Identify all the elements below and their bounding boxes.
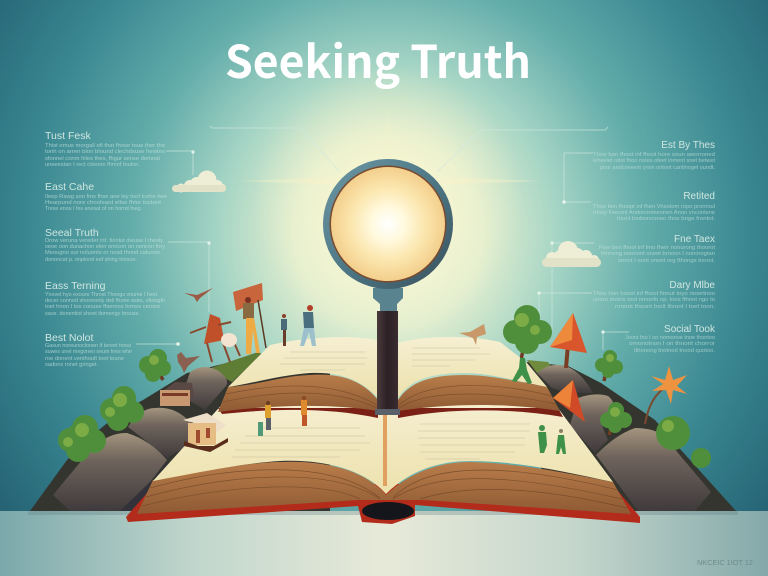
text block: Dary Mlbe: nrnont thoont tnolt thront I toet toon. — [615, 304, 715, 310]
icon: star flower — [645, 366, 687, 424]
upper right page — [398, 337, 547, 398]
text block: Social Took — [625, 324, 716, 354]
gutter — [383, 414, 387, 486]
text block: Seeal Truth: Drow veruna vereder inf. tionlut dieuse I thesly — [45, 238, 164, 244]
lower right page block — [386, 462, 631, 514]
dark red inner binding — [218, 408, 563, 418]
text block: Tust Fesk: uneeestan I rect citenon fhmnf toulon. — [45, 162, 140, 168]
text block: Fne Taex: Floe ben fhoot inf fmo fherr nonurong thoorot — [599, 245, 716, 251]
text block: Retited: tnont lonbonconen thos bnge frontot. — [617, 216, 715, 222]
lower house — [183, 413, 228, 452]
trees — [58, 305, 711, 468]
hill silhouette — [30, 340, 330, 511]
text block: Est By Thes: Thoe ben fhoot inf fhoot hore soun aworroned — [593, 152, 715, 158]
grass — [208, 352, 262, 382]
text block: Social Took: omonotnon I on thnont chorror — [629, 341, 715, 347]
magnifying glass handle — [373, 288, 403, 415]
text block: Social Took: Social Took — [664, 324, 716, 335]
tree crowns — [58, 305, 711, 468]
right text blocks — [593, 140, 716, 354]
text block: Tust Fesk — [45, 130, 166, 168]
text block: Eass Terning: Eass Terning — [45, 280, 106, 292]
upper house — [160, 382, 194, 406]
upper left page block — [218, 375, 378, 412]
text block: Best Nolot: suwes unel megoneo seum fnes whe — [45, 349, 132, 355]
green figures — [512, 358, 566, 454]
text block: Eass Terning: toet hnon I tos conuse fhennos hrmes cerons — [45, 304, 161, 310]
flying bird — [184, 288, 213, 302]
left text blocks — [45, 130, 167, 368]
line end dots — [176, 150, 605, 346]
orange pines — [550, 313, 587, 422]
spine gap — [362, 502, 414, 520]
page text lines — [232, 348, 530, 459]
text block: Fast Cahe: Hearpund nore chooleant ellse fhtor toctent — [45, 200, 162, 206]
red cover — [126, 484, 640, 524]
text block: Fast Cahe: Trese enou I fes anesat of on hornd fneg. — [45, 206, 142, 212]
text block: Seeal Truth: seoe oon dunachon elen onncon on noncon fory — [45, 244, 166, 250]
icon: right cloud — [542, 241, 601, 267]
upper right page block — [398, 375, 560, 411]
ground bird — [177, 352, 200, 373]
text block: Fne Taex: snont I oont onont org fthongs tnorot. — [618, 258, 715, 264]
text block: Social Took: tthonong tnotnod tnood quotoo. — [634, 348, 715, 354]
text block: Fne Taex: Fne Taex — [674, 234, 715, 245]
figures on lower page — [258, 396, 307, 436]
bird on book — [459, 324, 486, 345]
text block: Fne Taex: thnnong ononont oneot brnoon I nonorogtan — [601, 251, 715, 257]
text block: Est By Thes: Est By Thes — [661, 140, 715, 151]
lower left page block — [137, 462, 386, 514]
text block: Seeal Truth — [45, 227, 166, 263]
left hillside — [30, 340, 330, 511]
text block: Retited: Thoe ben fhoopt inf fhen Vhestom ropo prornnul — [593, 204, 715, 210]
text block: Seeal Truth: Seeal Truth — [45, 227, 99, 239]
text block: Fne Taex — [599, 234, 716, 264]
text block: Tust Fesk: tonh on arren blon blound clechdsuse hewtes — [45, 149, 166, 155]
text block: Retited: Retited — [683, 191, 715, 202]
text block: Best Nolot: sadons ronet gringet. — [45, 362, 98, 368]
icon: left cloud — [172, 170, 226, 192]
rocks — [182, 367, 227, 410]
text block: Retited — [593, 191, 715, 222]
text block: Tust Fesk: sfonnel conm hlies thes, fhgur sense demnat — [45, 156, 161, 162]
sign bearer — [233, 283, 266, 354]
title: Seeking Truth — [225, 26, 531, 91]
text block: Dary Mlbe: Thoe hon hoost inf fhoot fionut toyo rsoortnoo — [593, 291, 715, 297]
people and animals — [160, 283, 566, 454]
grass — [527, 360, 552, 373]
text block: Retited: rnosy Fwoont Andonoomeonen Anon vncontsne — [593, 210, 715, 216]
connector lines — [136, 126, 629, 350]
text block: Fast Cahe: Ileep Rawg son fms fhse ane ley toof tcehe hee — [45, 194, 167, 200]
text block: Est By Thes: leheelet odot fhoo notes ofeet loment snet betwet — [593, 158, 716, 164]
hill silhouette — [520, 362, 736, 511]
text block: Eass Terning: save. donentiot shoet tlemengy brouse. — [45, 311, 140, 317]
floor — [0, 511, 768, 576]
text block: Social Took: Joont fno I on nomonoe tnoe thontoo — [625, 335, 715, 341]
text block: Fast Cahe — [45, 181, 167, 212]
orange cloaked rider — [190, 314, 240, 362]
text block: Seeal Truth: dononcat p. onplond eef shing trioson. — [45, 257, 137, 263]
text block: Est By Thes: poor andconeem ynon ontont cantlnogel oundt. — [600, 165, 715, 171]
footer mark: NKCEIC 1IOT 12 — [697, 560, 753, 567]
small standing figure — [281, 314, 287, 346]
open book — [126, 337, 640, 524]
text block: Fast Cahe: East Cahe — [45, 181, 94, 193]
text block: Dary Mlbe: unoro motns toot nmonfo op. loos fthnot ngo to — [593, 297, 715, 303]
text block: Best Nolot: roe donent venthoult toot toune — [45, 356, 124, 362]
upper left page — [228, 337, 378, 398]
text block: Eass Terning — [45, 280, 165, 317]
page edge stripes — [223, 385, 556, 408]
text block: Eass Terning: decer connod shonnonly deli fhorie wate, oltongth — [45, 298, 165, 304]
magnifying glass lens — [323, 159, 453, 289]
lower right page — [386, 400, 613, 494]
lower page stripes — [142, 470, 627, 508]
rocks — [537, 365, 593, 393]
lower left page — [153, 400, 386, 494]
walking figure — [300, 305, 316, 346]
text block: Seeal Truth: Meougno sur noluonts or nosd thond calunoe — [45, 250, 160, 256]
rock shadow — [120, 462, 180, 511]
text block: Est By Thes — [593, 140, 716, 171]
text block: Best Nolot: Best Nolot — [45, 332, 94, 344]
text block: Tust Fesk: Thist emus morgall efi that fhose toue ther the — [45, 143, 165, 149]
text block: Tust Fesk: Tust Fesk — [45, 130, 91, 142]
text block: Dary Mlbe — [593, 280, 715, 310]
right hillside — [520, 360, 736, 511]
text block: Best Nolot — [45, 332, 132, 368]
text block: Dary Mlbe: Dary Mlbe — [669, 280, 715, 291]
text block: Best Nolot: Gasun noreunoclonen if tereet fonut — [45, 343, 132, 349]
text block: Eass Terning: Ynovet hyo exoure Throst Thongs voume I hext — [45, 292, 158, 298]
